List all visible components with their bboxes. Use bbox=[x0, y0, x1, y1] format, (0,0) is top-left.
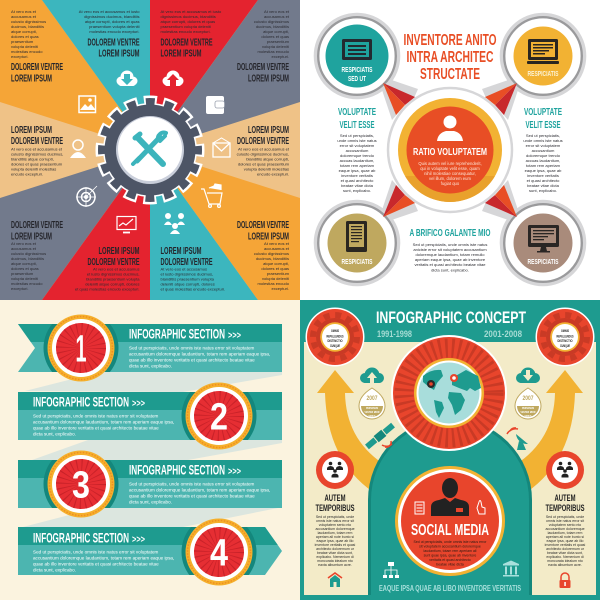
circle: brown monitor: RESPICIATIS bbox=[528, 259, 559, 266]
text: top left orange: volupta deleniti bbox=[11, 44, 38, 49]
text: bottom teal: et iusto dignissimos ducimus, bbox=[160, 272, 213, 276]
text: top left orange: LOREM IPSUM bbox=[11, 74, 52, 84]
arrow: left bbox=[317, 370, 385, 492]
text: bottom red: blanditiis praesentium volupta bbox=[86, 276, 140, 282]
text: autem right: inventore veritatis et quasi bbox=[545, 543, 586, 547]
social media badge: sunt quae ipsa, quae ab inventore bbox=[424, 554, 476, 558]
ribbon 1 bbox=[18, 314, 282, 382]
icon: cloud upload teal bbox=[360, 368, 384, 383]
badge: top right: OMNIS bbox=[561, 328, 569, 333]
badge: top right bbox=[536, 308, 594, 366]
text: bottom teal: LOREM IPSUM bbox=[160, 246, 202, 257]
text: autem left: aperiam all note bunto si bbox=[316, 535, 354, 539]
title: inventore: STRUCTATE bbox=[420, 66, 480, 83]
text: autem left bbox=[315, 493, 356, 567]
circle: olive e-reader: RESPICIATIS bbox=[342, 259, 373, 266]
text: bottom right orange bbox=[237, 220, 290, 291]
text: autem left: accusantium doloremque bbox=[315, 527, 355, 531]
text: top right grey bbox=[237, 9, 290, 84]
badge: top left: CUMQUE bbox=[330, 343, 340, 348]
text: left column: beatae vitae dicta bbox=[341, 183, 374, 188]
ribbon 2: Sed ut perspiciatis, unde omnis iste natus error sit voluptatem bbox=[33, 414, 159, 418]
text: right column bbox=[523, 107, 563, 193]
icon: cloud download teal bbox=[516, 368, 540, 383]
text: bottom left grey bbox=[11, 220, 63, 291]
ribbon 1: accusantium doloremque laudantium, totam rem aperiam eaque ipsa, bbox=[129, 352, 270, 356]
text: top teal: dignissimos ducimus, blanditiis bbox=[84, 14, 140, 19]
text: autem right: voluptatem sento nto bbox=[549, 523, 581, 527]
text: autem left: AUTEM bbox=[324, 493, 346, 503]
text: autem right: moncurata idealum nto bbox=[547, 559, 583, 563]
central circle: nihil molestiae consequatur, bbox=[424, 171, 476, 176]
text: autem left: eaque ipsa, quae ab illo bbox=[317, 539, 354, 543]
text: top left orange: ducimus, blanditiis bbox=[11, 24, 44, 29]
icon: satellite bbox=[364, 422, 396, 450]
text: bottom centre: A BRIFICO GALANTE MIO bbox=[410, 228, 491, 239]
text: bottom left grey: molestias encudo bbox=[11, 281, 43, 286]
badge: 2007 left bbox=[359, 388, 385, 419]
text: top right grey: molestias encudo bbox=[258, 49, 290, 54]
central circle bbox=[388, 88, 512, 212]
text: bottom right orange: excepturi. bbox=[271, 286, 289, 291]
text: top left orange: cuiusto dignissimos bbox=[11, 19, 46, 24]
text: top left orange: dolores et quas bbox=[11, 34, 39, 39]
text: bottom centre: aperiam eaque ipsa, quae ab inventore bbox=[415, 257, 486, 262]
text: right column: inventore veritatis bbox=[527, 173, 559, 178]
circle: brown monitor bbox=[501, 201, 585, 285]
icon: lock bbox=[560, 573, 570, 588]
text: left column: doloremque trendo bbox=[340, 153, 375, 158]
text: left column: inventore veritatis bbox=[341, 173, 373, 178]
badge: top right: REPELLENDUS bbox=[556, 333, 574, 338]
badge: 2007 right: PERSONUM bbox=[522, 406, 534, 410]
text: right column: accusantium bbox=[532, 148, 555, 153]
text: autem right: eaxta albumtum acre. bbox=[548, 563, 582, 567]
text: bottom right orange: At vero eos et bbox=[264, 241, 290, 246]
text: bottom red: LOREM IPSUM bbox=[98, 246, 140, 257]
text: left column: totam rem aperiam bbox=[340, 163, 375, 168]
title: infographic concept bbox=[376, 308, 526, 340]
circle: olive e-reader bbox=[315, 201, 399, 285]
ribbon 1: >>> bbox=[228, 330, 241, 342]
text: bottom left grey: volupta deleniti bbox=[11, 276, 38, 281]
circle: yellow laptop: RESPICIATIS bbox=[528, 71, 559, 78]
icon: cloud upload bbox=[162, 70, 184, 86]
text: top teal: DOLOREM VENTRE bbox=[88, 38, 140, 48]
text: top teal: At vero eos et accusamus et iusto bbox=[79, 9, 140, 14]
badge: top left bbox=[306, 308, 364, 366]
text: top red: At vero eos et accusamus et iusto bbox=[160, 9, 222, 14]
ribbon 3 bbox=[18, 450, 282, 518]
text: left column: accuas laudantium, bbox=[340, 158, 374, 163]
panel: gear sunburst bbox=[0, 0, 300, 300]
ribbon 3: 3 bbox=[72, 464, 90, 506]
ribbon 1: INFOGRAPHIC SECTION bbox=[129, 326, 225, 342]
text: top red: dignissimos ducimus, blanditiis bbox=[160, 14, 216, 19]
panel: circles diagram bbox=[315, 14, 585, 285]
text: top left orange: molestias encudo bbox=[11, 49, 43, 54]
ribbon 2 bbox=[18, 382, 282, 450]
social media badge: veritatis et quasi architecto bbox=[429, 558, 471, 562]
ribbon 4: INFOGRAPHIC SECTION bbox=[33, 530, 129, 546]
text: bottom teal: et quas molestias encudo excepturi. bbox=[160, 286, 225, 292]
text: top right grey: praesentium bbox=[267, 39, 290, 44]
ribbon 4: 4 bbox=[210, 532, 228, 574]
text: left tan: At vero eos et accusamus et bbox=[11, 146, 63, 152]
icon: satellite waves bbox=[382, 441, 392, 447]
text: left column: sunt, explicabo. bbox=[343, 188, 371, 193]
text: right tan: LOREM IPSUM bbox=[248, 125, 289, 136]
icon: document bbox=[415, 502, 424, 514]
text: bottom left grey: dolores et quas bbox=[11, 266, 39, 271]
text: bottom left grey: DOLOREM VENTRE bbox=[11, 220, 63, 231]
arch bbox=[368, 418, 532, 600]
text: right tan: dolores et quas praesentium bbox=[238, 162, 290, 166]
text: autem right: aperiam all note bunto si bbox=[546, 535, 584, 539]
text: autem right: omnis iste natus error sit bbox=[546, 519, 584, 523]
text: right column: VELIT ESSE bbox=[526, 120, 561, 131]
badge: 2007 left: 2007 bbox=[366, 396, 378, 402]
text: left column: VELIT ESSE bbox=[340, 120, 375, 131]
title: infographic concept: 1991-1998 bbox=[377, 329, 412, 340]
text: bottom teal: blanditiis praesentium volupta bbox=[160, 276, 215, 282]
badge: top left: OMNIS bbox=[331, 328, 339, 333]
text: top left orange: At vero eos et bbox=[11, 9, 37, 14]
text: autem left: inventore veritatis et quasi bbox=[315, 543, 356, 547]
text: top teal: praesentium volupta deleniti bbox=[89, 24, 140, 29]
text: left column: et quasi architecto bbox=[341, 178, 374, 183]
ribbon 3: >>> bbox=[228, 466, 241, 478]
text: bottom right orange: DOLOREM VENTRE bbox=[237, 220, 289, 231]
ribbon 1: quae ab illo inventore veritatis et quasi architecto beatae vitae bbox=[129, 358, 255, 362]
text: bottom right orange: ducimus, blanditiis bbox=[256, 256, 289, 261]
text: left tan: LOREM IPSUM bbox=[11, 125, 52, 136]
panel: ribbons bbox=[0, 300, 300, 600]
ribbon 2: INFOGRAPHIC SECTION bbox=[33, 394, 129, 410]
text: top red bbox=[160, 9, 222, 60]
text: top right grey: ducimus, blanditiis bbox=[256, 24, 289, 29]
ribbon 3: Sed ut perspiciatis, unde omnis iste natus error sit voluptatem bbox=[129, 482, 255, 486]
central circle: RATIO VOLUPTATEM bbox=[413, 146, 487, 158]
text: bottom teal: deleniti atque corrupti, dolores bbox=[160, 282, 215, 286]
ribbon 1: Sed ut perspiciatis, unde omnis iste natus error sit voluptatem bbox=[129, 346, 255, 350]
icon: mail bbox=[213, 138, 230, 157]
text: top teal: molestias encudo excepturi. bbox=[89, 29, 140, 34]
icon: bank bbox=[503, 560, 519, 576]
central circle: qui in voluptate velit esse, quam bbox=[420, 166, 480, 171]
text: autem right: architecto doloremum ur bbox=[546, 547, 585, 551]
text: bottom right orange: LOREM IPSUM bbox=[248, 232, 289, 242]
text: right tan: culusto dignissimos ducimus, bbox=[237, 152, 289, 156]
central circle: fugiat quo bbox=[441, 181, 460, 186]
text: bottom right orange: dolores et quas bbox=[261, 266, 289, 271]
title: infographic concept: 2001-2008 bbox=[484, 329, 522, 340]
text: bottom left grey: ducimus, blanditiis bbox=[11, 256, 44, 261]
ribbon 2: accusantium doloremque laudantium, totam rem aperiam eaque ipsa, bbox=[33, 420, 174, 424]
text: bottom right orange: accusamus et bbox=[264, 246, 290, 251]
badge: 2007 right bbox=[515, 388, 541, 419]
text: right column: error sit voluptatem bbox=[526, 143, 561, 148]
text: bottom right orange: molestias encudo bbox=[258, 281, 290, 286]
text: bottom red: et quas molestias encudo excepturi. bbox=[75, 286, 140, 292]
badge: 2007 right: VESTER MIOR bbox=[520, 410, 536, 414]
text: autem right: Sed ut perspiciatis, unde bbox=[546, 515, 584, 519]
text: autem right: eaque ipsa, quae ab illo bbox=[547, 539, 584, 543]
central circle: Quis autem vel iure reprehenderit, bbox=[418, 161, 482, 166]
text: right tan: encudo excepturi. bbox=[257, 172, 289, 176]
text: bottom teal: DOLOREM VENTRE bbox=[160, 257, 213, 268]
text: autem left: laudantium, totam rem bbox=[318, 531, 352, 535]
social media badge bbox=[395, 466, 505, 576]
text: bottom centre: veritatis et quasi architecto beatae vitae bbox=[414, 262, 486, 267]
text: bottom red: et iusto dignissimos ducimus, bbox=[87, 272, 140, 276]
social media badge: laudantium, totam rem aperiam all bbox=[424, 549, 477, 553]
badge: 2007 right: SIMUS bbox=[524, 414, 532, 418]
ribbon 4: quae ab illo inventore veritatis et quasi architecto beatae vitae bbox=[33, 562, 159, 566]
text: bottom right orange: atque corrupti, bbox=[263, 261, 289, 266]
text: bottom left grey: excepturi. bbox=[11, 286, 29, 291]
caption: eaque ipsa: EAQUE IPSA QUAE AB LIBO INVENTORE VERITATIS bbox=[379, 584, 521, 593]
social media badge: SOCIAL MEDIA bbox=[411, 522, 489, 539]
text: left column: Sed ut perspiciatis, bbox=[340, 133, 374, 138]
social media badge: Sed ut perspiciatis, unde omnis iste natus error bbox=[414, 540, 487, 544]
text: top red: praesentium volupta deleniti bbox=[160, 24, 211, 29]
ribbon 2: dicta sunt, explicabo. bbox=[33, 432, 76, 436]
gear bbox=[100, 100, 200, 200]
text: bottom left grey: atque corrupti, bbox=[11, 261, 37, 266]
ribbon 2: quae ab illo inventore veritatis et quasi architecto beatae vitae bbox=[33, 426, 159, 430]
text: left column bbox=[337, 107, 377, 193]
text: right column: et quasi architecto bbox=[527, 178, 560, 183]
text: right tan bbox=[237, 125, 290, 176]
text: autem left: omnis iste natus error sit bbox=[316, 519, 354, 523]
arrow: right bbox=[515, 370, 583, 492]
text: autem left: architecto doloremum ur bbox=[316, 547, 355, 551]
connectors bbox=[380, 76, 520, 224]
icon: target bbox=[76, 186, 97, 207]
circle: teal tablet bbox=[315, 14, 399, 98]
text: bottom red: DOLOREM VENTRE bbox=[88, 257, 140, 268]
icon: user pin bbox=[70, 140, 86, 158]
ribbon 3: accusantium doloremque laudantium, totam rem aperiam eaque ipsa, bbox=[129, 488, 270, 492]
text: bottom left grey: accusamus et bbox=[11, 246, 37, 251]
text: top left orange: DOLOREM VENTRE bbox=[11, 62, 63, 73]
title: infographic concept: INFOGRAPHIC CONCEPT bbox=[376, 308, 526, 327]
text: right column: totam rem aperiam bbox=[526, 163, 561, 168]
circle: teal tablet: SED UT bbox=[348, 76, 367, 83]
ribbon 4: >>> bbox=[132, 534, 145, 546]
text: top right grey: LOREM IPSUM bbox=[248, 74, 289, 84]
text: left tan bbox=[11, 125, 63, 176]
text: left tan: DOLOREM VENTRE bbox=[11, 136, 63, 147]
ribbon 3: INFOGRAPHIC SECTION bbox=[129, 462, 225, 478]
badge: 2007 right: 2007 bbox=[522, 396, 534, 402]
text: top left orange bbox=[11, 9, 63, 84]
badge: 2007 left: SIMUS bbox=[368, 414, 376, 418]
badge: people left bbox=[316, 451, 354, 489]
text: right tan: At vero eos et accusamus et bbox=[238, 146, 290, 152]
text: top red: LOREM IPSUM bbox=[160, 48, 202, 60]
text: autem right: AUTEM bbox=[554, 493, 576, 503]
text: bottom centre: aniciste error sit voluptatem accusantium bbox=[413, 247, 487, 252]
text: top teal: LOREM IPSUM bbox=[98, 48, 140, 60]
social media badge: sit voluptatem accusantium doloremque bbox=[419, 544, 481, 548]
text: left tan: culusto dignissimos ducimus, bbox=[11, 152, 63, 156]
text: top left orange: accusamus et bbox=[11, 14, 37, 19]
text: autem right: laudantium, totam rem bbox=[548, 531, 582, 535]
text: top right grey: At vero eos et bbox=[264, 9, 290, 14]
text: top right grey: excepturi. bbox=[271, 54, 289, 59]
icon: wallet bbox=[206, 96, 224, 114]
text: autem left: moncurata idealum nto bbox=[317, 559, 353, 563]
text: bottom red bbox=[75, 246, 140, 292]
badge: 2007 left: VESTER MIOR bbox=[364, 410, 380, 414]
text: top red: DOLOREM VENTRE bbox=[160, 38, 213, 48]
text: right column: eaque ipsa, quae ab bbox=[525, 168, 562, 173]
badge: top left: REPELLENDUS bbox=[326, 333, 344, 338]
icon: person bbox=[431, 478, 469, 516]
text: right column: beatae vitae dicta bbox=[527, 183, 560, 188]
text: top red: molestias encudo excepturi. bbox=[160, 29, 211, 34]
text: autem right: accusantium doloremque bbox=[545, 527, 585, 531]
text: bottom teal: At vero eos et accusamus bbox=[160, 266, 207, 272]
circle: teal tablet: RESPICIATIS bbox=[342, 67, 373, 74]
icon: cloud download bbox=[116, 70, 138, 86]
text: bottom red: deleniti atque corrupti, dolores bbox=[85, 282, 140, 286]
text: left tan: blanditiis atque corrupti, bbox=[11, 156, 54, 162]
badge: top right: CUMQUE bbox=[560, 343, 570, 348]
icon: picture bbox=[79, 96, 96, 112]
text: bottom left grey: LOREM IPSUM bbox=[11, 232, 52, 242]
icon: radar dish bbox=[507, 428, 528, 450]
text: autem left: explicabo. Nemenium di bbox=[316, 555, 354, 559]
title: inventore: INVENTORE ANITO bbox=[404, 32, 496, 49]
text: bottom left grey: culusto dignissimos bbox=[11, 251, 46, 256]
text: top teal bbox=[79, 9, 140, 60]
text: bottom right orange: volupta deleniti bbox=[262, 276, 289, 281]
ribbon 4: dicta sunt, explicabo. bbox=[33, 568, 76, 572]
text: top left orange: excepturi. bbox=[11, 54, 29, 59]
ribbon 2: 2 bbox=[210, 396, 228, 438]
text: autem right: explicabo. Nemenium di bbox=[546, 555, 584, 559]
text: right column: accuas laudantium, bbox=[526, 158, 560, 163]
icon: touch hand bbox=[477, 500, 485, 514]
text: bottom left grey: At vero eos et bbox=[11, 241, 37, 246]
text: right column: VOLUPTATE bbox=[524, 107, 562, 118]
ribbon 1: dicta sunt, explicabo. bbox=[129, 364, 172, 368]
text: top right grey: dolores et quas bbox=[261, 34, 289, 39]
text: left column: VOLUPTATE bbox=[338, 107, 376, 118]
pale diagonal bands bbox=[23, 372, 282, 527]
text: bottom centre bbox=[410, 228, 491, 272]
ribbon 3: dicta sunt, explicabo. bbox=[129, 500, 172, 504]
arrow triangles bbox=[383, 83, 517, 217]
title: inventore: INTRA ARCHITEC bbox=[406, 49, 494, 66]
icon: monitor bbox=[117, 216, 136, 232]
badge: top right: DISTINCTIO bbox=[558, 338, 572, 343]
text: left column: error sit voluptatem bbox=[340, 143, 375, 148]
text: autem left: TEMPORIBUS bbox=[316, 503, 354, 513]
text: left column: eaque ipsa, quae ab bbox=[339, 168, 376, 173]
text: top right grey: accusamus et bbox=[264, 14, 290, 19]
title: inventore bbox=[404, 32, 496, 83]
ribbon 2: >>> bbox=[132, 398, 145, 410]
text: bottom right orange: praesentium bbox=[267, 271, 290, 276]
text: left tan: encudo excepturi. bbox=[11, 172, 43, 176]
text: left column: unde omnis iste natus bbox=[337, 138, 377, 143]
text: right tan: volupta deleniti molestias bbox=[244, 166, 289, 172]
badge: 2007 left: PERSONUM bbox=[366, 406, 378, 410]
text: left tan: volupta deleniti molestias bbox=[11, 166, 56, 172]
text: right column: unde omnis iste natus bbox=[523, 138, 563, 143]
text: top right grey: cuiusto dignissimos bbox=[254, 19, 289, 24]
circle: yellow laptop bbox=[501, 14, 585, 98]
text: top teal: atque corrupti, dolores et quas bbox=[85, 19, 140, 24]
text: top right grey: DOLOREM VENTRE bbox=[237, 62, 289, 73]
text: right tan: blanditiis atque corrupti, bbox=[246, 156, 289, 162]
text: right tan: DOLOREM VENTRE bbox=[237, 136, 289, 147]
text: right column: doloremque trendo bbox=[526, 153, 561, 158]
text: autem left: voluptatem sento nto bbox=[319, 523, 351, 527]
text: autem left: eaxta albumtum acre. bbox=[318, 563, 352, 567]
ribbon 4: Sed ut perspiciatis, unde omnis iste natus error sit voluptatem bbox=[33, 550, 159, 554]
social media badge: beatae vitae dicta bbox=[436, 562, 464, 566]
text: left tan: dolores et quas praesentium bbox=[11, 162, 63, 166]
text: right column: sunt, explicabo. bbox=[529, 188, 557, 193]
ribbon 3: quae ab illo inventore veritatis et quasi architecto beatae vitae bbox=[129, 494, 255, 498]
text: bottom left grey: praesentium bbox=[11, 271, 34, 276]
text: right column: Sed ut perspiciatis, bbox=[526, 133, 560, 138]
ribbon 1: 1 bbox=[76, 328, 86, 370]
text: top red: atque corrupti, dolores et quas bbox=[160, 19, 215, 24]
ribbon 4: accusantium doloremque laudantium, totam rem aperiam eaque ipsa, bbox=[33, 556, 174, 560]
text: top left orange: praesentium bbox=[11, 39, 34, 44]
badge: top left: DISTINCTIO bbox=[328, 338, 342, 343]
text: autem right bbox=[545, 493, 586, 567]
text: bottom centre: doloremque laudantium, totam remullo bbox=[415, 252, 485, 257]
text: bottom centre: dicta sunt, explicabo. bbox=[431, 268, 469, 272]
text: top right grey: atque corrupti, bbox=[263, 29, 289, 34]
text: left column: accusantium bbox=[346, 148, 369, 153]
text: bottom teal bbox=[160, 246, 225, 292]
text: autem left: beatae vitae dicta sunt, bbox=[317, 551, 353, 555]
badge: people right bbox=[546, 451, 584, 489]
central circle: vel illum, dolorem eum bbox=[429, 176, 471, 181]
text: bottom right orange: culusto dignissimos bbox=[254, 251, 289, 256]
text: autem left: Sed ut perspiciatis, unde bbox=[316, 515, 354, 519]
icon: home bbox=[328, 573, 342, 587]
text: bottom red: At vero eos et accusamus bbox=[93, 266, 140, 272]
ribbon 4 bbox=[18, 518, 282, 586]
panel: infographic concept bbox=[300, 300, 600, 600]
text: top right grey: volupta deleniti bbox=[262, 44, 289, 49]
text: bottom centre: Sed ut perspiciatis, unde omnis iste natus bbox=[413, 242, 487, 247]
icon: flowchart bbox=[383, 562, 399, 578]
icon: people bbox=[164, 213, 185, 234]
globe badge bbox=[391, 335, 507, 451]
text: top left orange: atque corrupti, bbox=[11, 29, 37, 34]
icon: cart bbox=[201, 184, 222, 207]
text: autem right: beatae vitae dicta sunt, bbox=[547, 551, 583, 555]
